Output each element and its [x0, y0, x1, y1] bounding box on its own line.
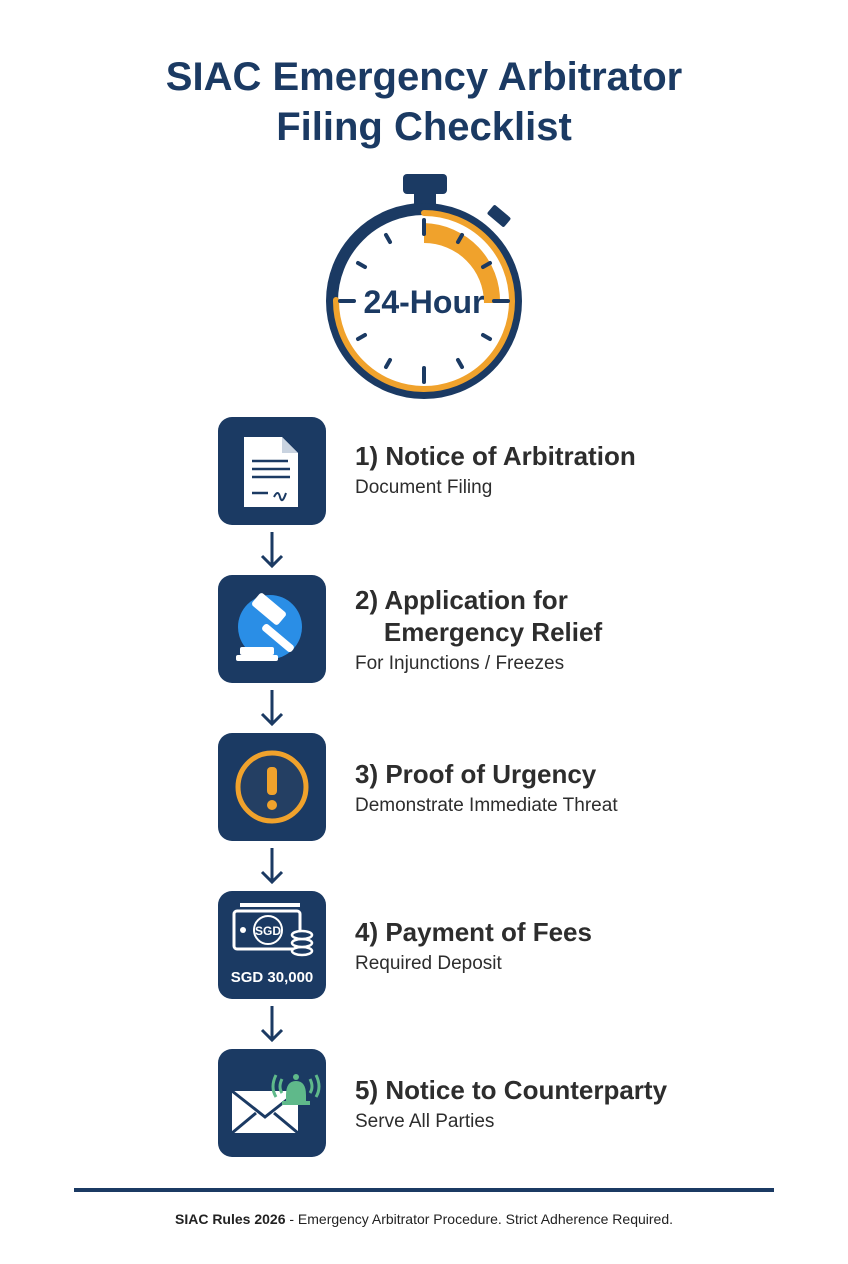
- step 4 text: [355, 917, 592, 974]
- arrow: [261, 1006, 283, 1042]
- title: SIAC Emergency Arbitrator: [166, 55, 682, 99]
- title: Filing Checklist: [276, 105, 572, 149]
- arrow: [261, 848, 283, 884]
- step 3 text: Demonstrate Immediate Threat: [355, 795, 618, 816]
- step 5 text: 5) Notice to Counterparty: [355, 1075, 667, 1105]
- icon: fees: SGD 30,000: [231, 969, 313, 986]
- step 2 text: 2) Application for: [355, 585, 568, 615]
- icon: stopwatch: [326, 174, 522, 399]
- step 2 text: For Injunctions / Freezes: [355, 653, 564, 674]
- icon: fees: [218, 891, 326, 999]
- step 1 text: Document Filing: [355, 477, 492, 498]
- step 1 text: 1) Notice of Arbitration: [355, 441, 636, 471]
- step 1 text: [355, 441, 636, 498]
- icon: fees: SGD: [255, 924, 281, 938]
- footer: SIAC Rules 2026 - Emergency Arbitrator Procedure. Strict Adherence Required.: [175, 1211, 673, 1227]
- step 2 text: [355, 585, 602, 674]
- title: [166, 55, 682, 149]
- step 5 text: Serve All Parties: [355, 1111, 494, 1132]
- icon: urgency: [218, 733, 326, 841]
- step 3 text: 3) Proof of Urgency: [355, 759, 596, 789]
- icon: document: [218, 417, 326, 525]
- step 5 text: [355, 1075, 667, 1132]
- icon: gavel: [218, 575, 326, 683]
- step 2 text: Emergency Relief: [384, 617, 602, 647]
- arrow: [261, 532, 283, 568]
- arrow: [261, 690, 283, 726]
- icon: stopwatch: 24-Hour: [364, 284, 484, 320]
- step 4 text: 4) Payment of Fees: [355, 917, 592, 947]
- step 4 text: Required Deposit: [355, 953, 502, 974]
- step 3 text: [355, 759, 618, 816]
- icon: envelope bell: [218, 1049, 326, 1157]
